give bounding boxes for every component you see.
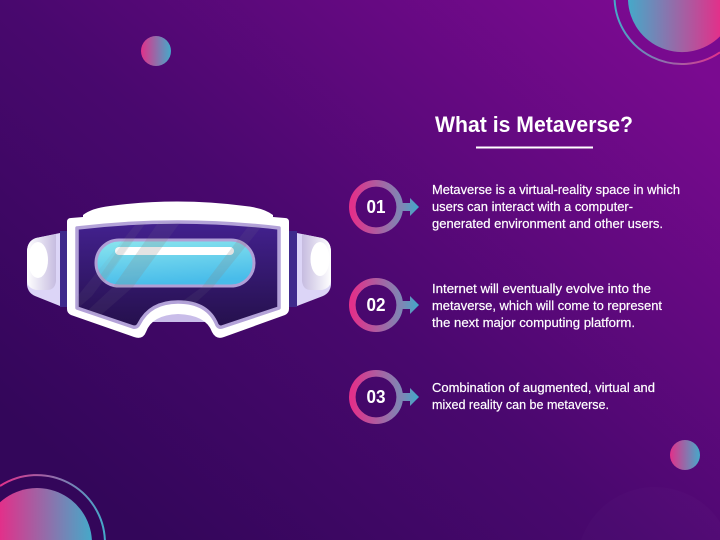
visor screen [96, 240, 254, 286]
item 01 text: users can interact with a computer- [432, 199, 633, 214]
icon: VR goggles [27, 202, 331, 338]
item 02 text: metaverse, which will come to represent [432, 298, 662, 313]
item 01 text [432, 182, 680, 231]
decoration: small circle top [141, 36, 171, 66]
item 01 badge: 01 [366, 196, 386, 217]
decoration: top-right circle [615, 0, 720, 64]
item 03 text: mixed reality can be metaverse. [432, 397, 609, 412]
item 02 badge [352, 281, 419, 329]
item 01 text: Metaverse is a virtual-reality space in which [432, 182, 680, 197]
item 02 badge: 02 [366, 294, 386, 315]
goggle frame [67, 212, 289, 338]
visor reflections [100, 238, 247, 287]
lens [77, 222, 279, 327]
title underline [476, 146, 593, 148]
top strap bump [83, 202, 273, 222]
decoration: small circle right [670, 440, 700, 470]
title: What is Metaverse? [435, 112, 633, 137]
item 03 badge [352, 373, 419, 421]
left earpiece [27, 231, 68, 307]
item 02 text: Internet will eventually evolve into the [432, 281, 651, 296]
item 03 text: Combination of augmented, virtual and [432, 380, 655, 395]
item 03 badge: 03 [366, 386, 386, 407]
item 01 text: generated environment and other users. [432, 216, 663, 231]
right earpiece [289, 231, 331, 307]
lens reflections [76, 220, 262, 316]
item 03 text [432, 380, 655, 412]
item 02 text: the next major computing platform. [432, 315, 635, 330]
visor highlight [115, 247, 234, 255]
item 02 text [432, 281, 662, 330]
item 01 badge [352, 183, 419, 231]
nose pad [150, 310, 208, 322]
decoration: bottom-left circle [0, 475, 105, 540]
